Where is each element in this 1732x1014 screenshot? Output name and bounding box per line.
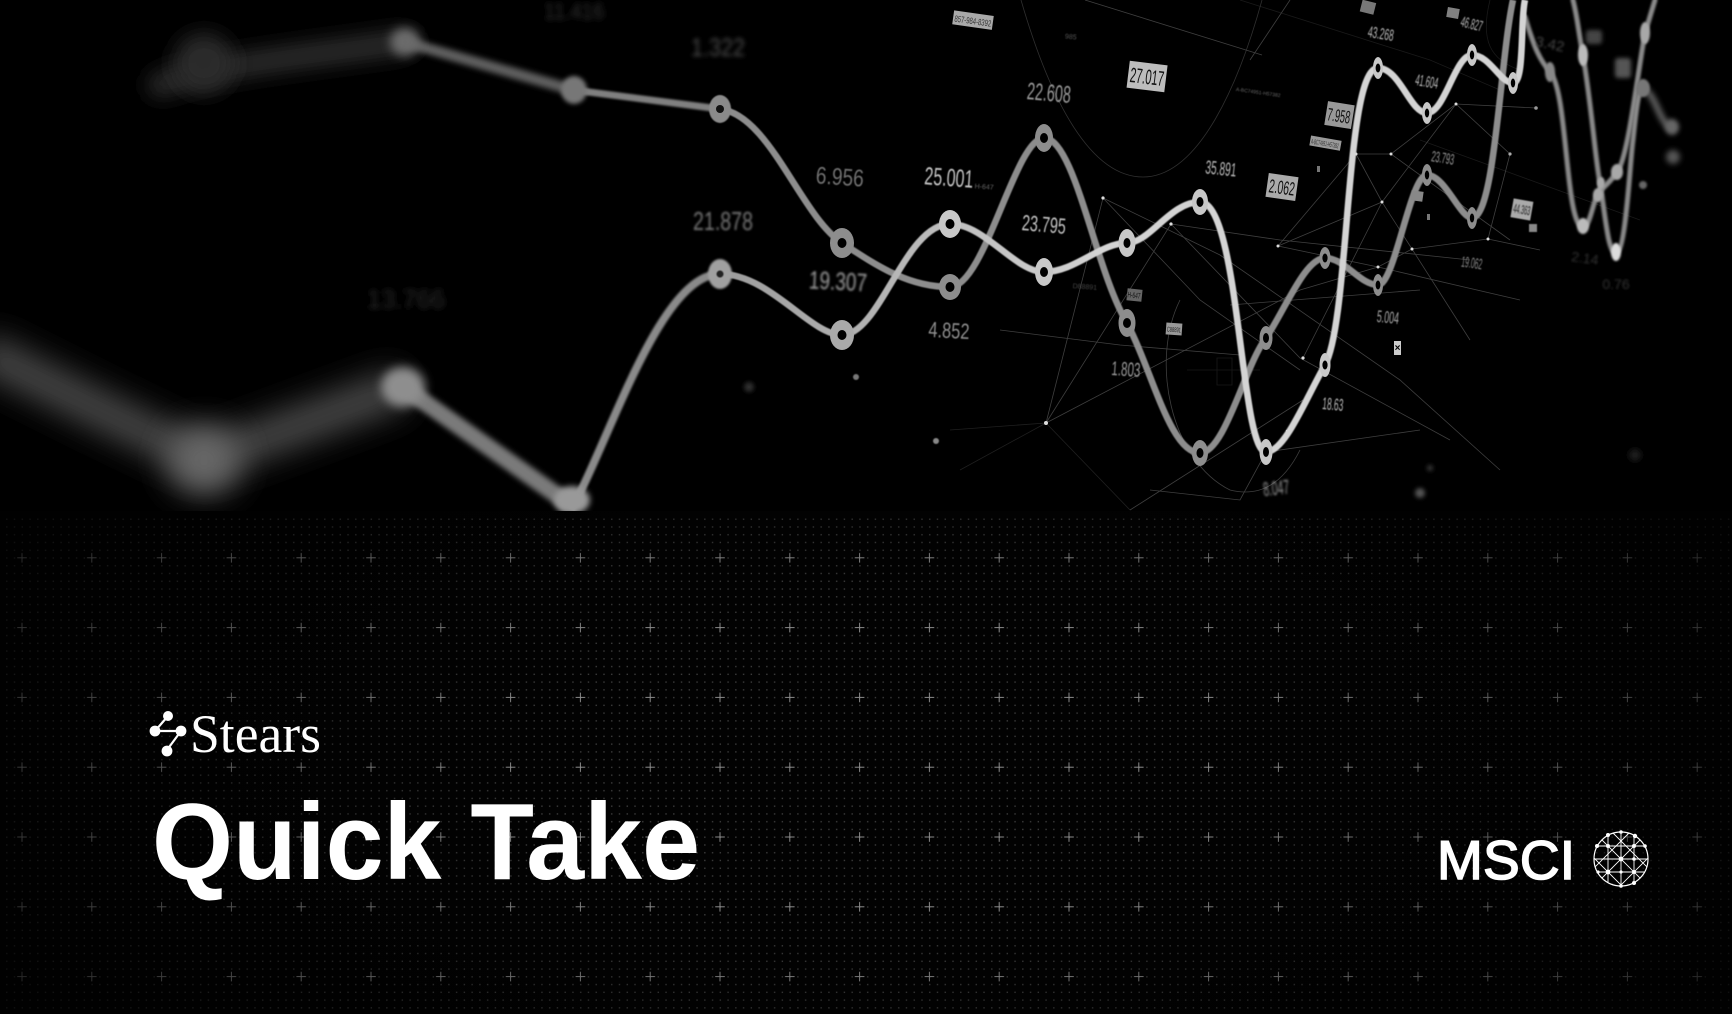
value labels: 4.852	[928, 317, 970, 344]
line series A: near section	[573, 90, 720, 109]
line series A: sharp section	[720, 0, 1513, 453]
line series B: far blurred node	[168, 426, 240, 494]
value labels	[815, 14, 1484, 415]
blurred right lines	[1525, 0, 1672, 253]
value labels: A-BC74951-H57382	[1235, 87, 1281, 99]
blurred value labels: 3.42	[1534, 33, 1566, 56]
wordmark: MSCI: MSCI	[1437, 829, 1575, 891]
value labels: 6.956	[815, 162, 865, 193]
line series B: mid blurred section	[403, 387, 571, 505]
network web lines	[950, 0, 1640, 510]
value labels: 23.793	[1430, 148, 1455, 169]
value labels: 35.891	[1204, 157, 1237, 182]
value labels: 23.795	[1021, 210, 1067, 239]
value labels: 41.604	[1414, 72, 1440, 93]
line series B: rising section	[571, 274, 720, 510]
title: Quick Take	[152, 781, 700, 903]
blurred value labels: 8.047	[1262, 477, 1290, 501]
wordmark: Stears: Stears	[190, 704, 321, 764]
blurred value labels	[367, 0, 1630, 501]
value labels: 1.803	[1111, 358, 1141, 382]
boxed labels: 2.062	[1267, 176, 1296, 201]
line series A: far blurred section	[160, 42, 405, 85]
network nodes	[1044, 102, 1538, 432]
line series B: sharp section	[720, 0, 1525, 452]
chart nodes: series B	[381, 44, 1518, 514]
value labels: H-647	[974, 183, 994, 192]
boxed labels: H-647	[1127, 290, 1141, 301]
blurred scatter dots	[744, 150, 1680, 498]
icon: Stears network mark	[150, 711, 186, 756]
value labels: D88891	[1072, 283, 1097, 292]
value labels: 46.827	[1459, 14, 1484, 35]
line series B: far blurred section	[0, 350, 403, 460]
boxed labels: 857-984-8392	[954, 14, 992, 29]
icon: MSCI globe	[1593, 830, 1649, 888]
panel: dotted footer background	[0, 511, 1732, 1014]
boxed labels: 44.363	[1512, 201, 1532, 218]
boxed labels: 27.017	[1129, 64, 1165, 91]
boxed labels: 7.958	[1326, 104, 1352, 128]
value labels: 43.268	[1367, 24, 1395, 45]
panel: line chart photo	[0, 0, 1680, 514]
value labels: 18.63	[1322, 394, 1344, 415]
value labels: 25.001	[924, 162, 974, 194]
value labels: 5.004	[1376, 307, 1400, 328]
value labels: 19.062	[1460, 254, 1483, 273]
boxed labels	[952, 0, 1631, 355]
chart nodes: series A	[390, 28, 1477, 466]
blurred right nodes	[1545, 22, 1679, 261]
line series A: mid blurred section	[405, 42, 573, 90]
line series A: far blurred node	[174, 33, 234, 93]
boxed labels: A-BC74951-H57382	[1310, 139, 1339, 150]
blurred value labels: 13.766	[367, 284, 445, 314]
blurred value labels: 2.14	[1570, 248, 1600, 268]
logo: MSCI	[1440, 830, 1649, 888]
blurred value labels: 1.322	[691, 34, 745, 62]
blurred value labels: 21.878	[693, 206, 753, 236]
boxed labels: ×	[1395, 343, 1401, 354]
value labels: 22.608	[1026, 78, 1072, 109]
blurred value labels: 19.307	[808, 267, 868, 297]
blurred value labels: 0.76	[1602, 276, 1630, 292]
boxed labels: C88891	[1167, 327, 1181, 334]
logo: Stears	[150, 704, 321, 764]
value labels: 985	[1065, 33, 1077, 42]
